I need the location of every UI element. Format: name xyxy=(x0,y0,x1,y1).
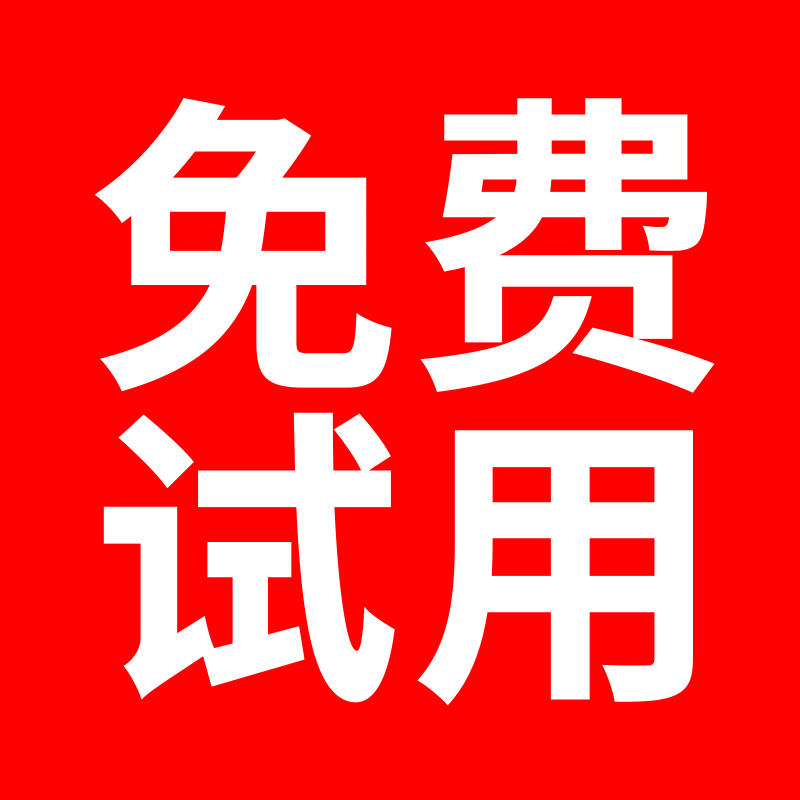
character: 费: 费 xyxy=(412,83,724,431)
character: 用: 用 xyxy=(411,394,723,742)
character: 试: 试 xyxy=(89,395,401,743)
character: 免: 免 xyxy=(89,84,401,432)
